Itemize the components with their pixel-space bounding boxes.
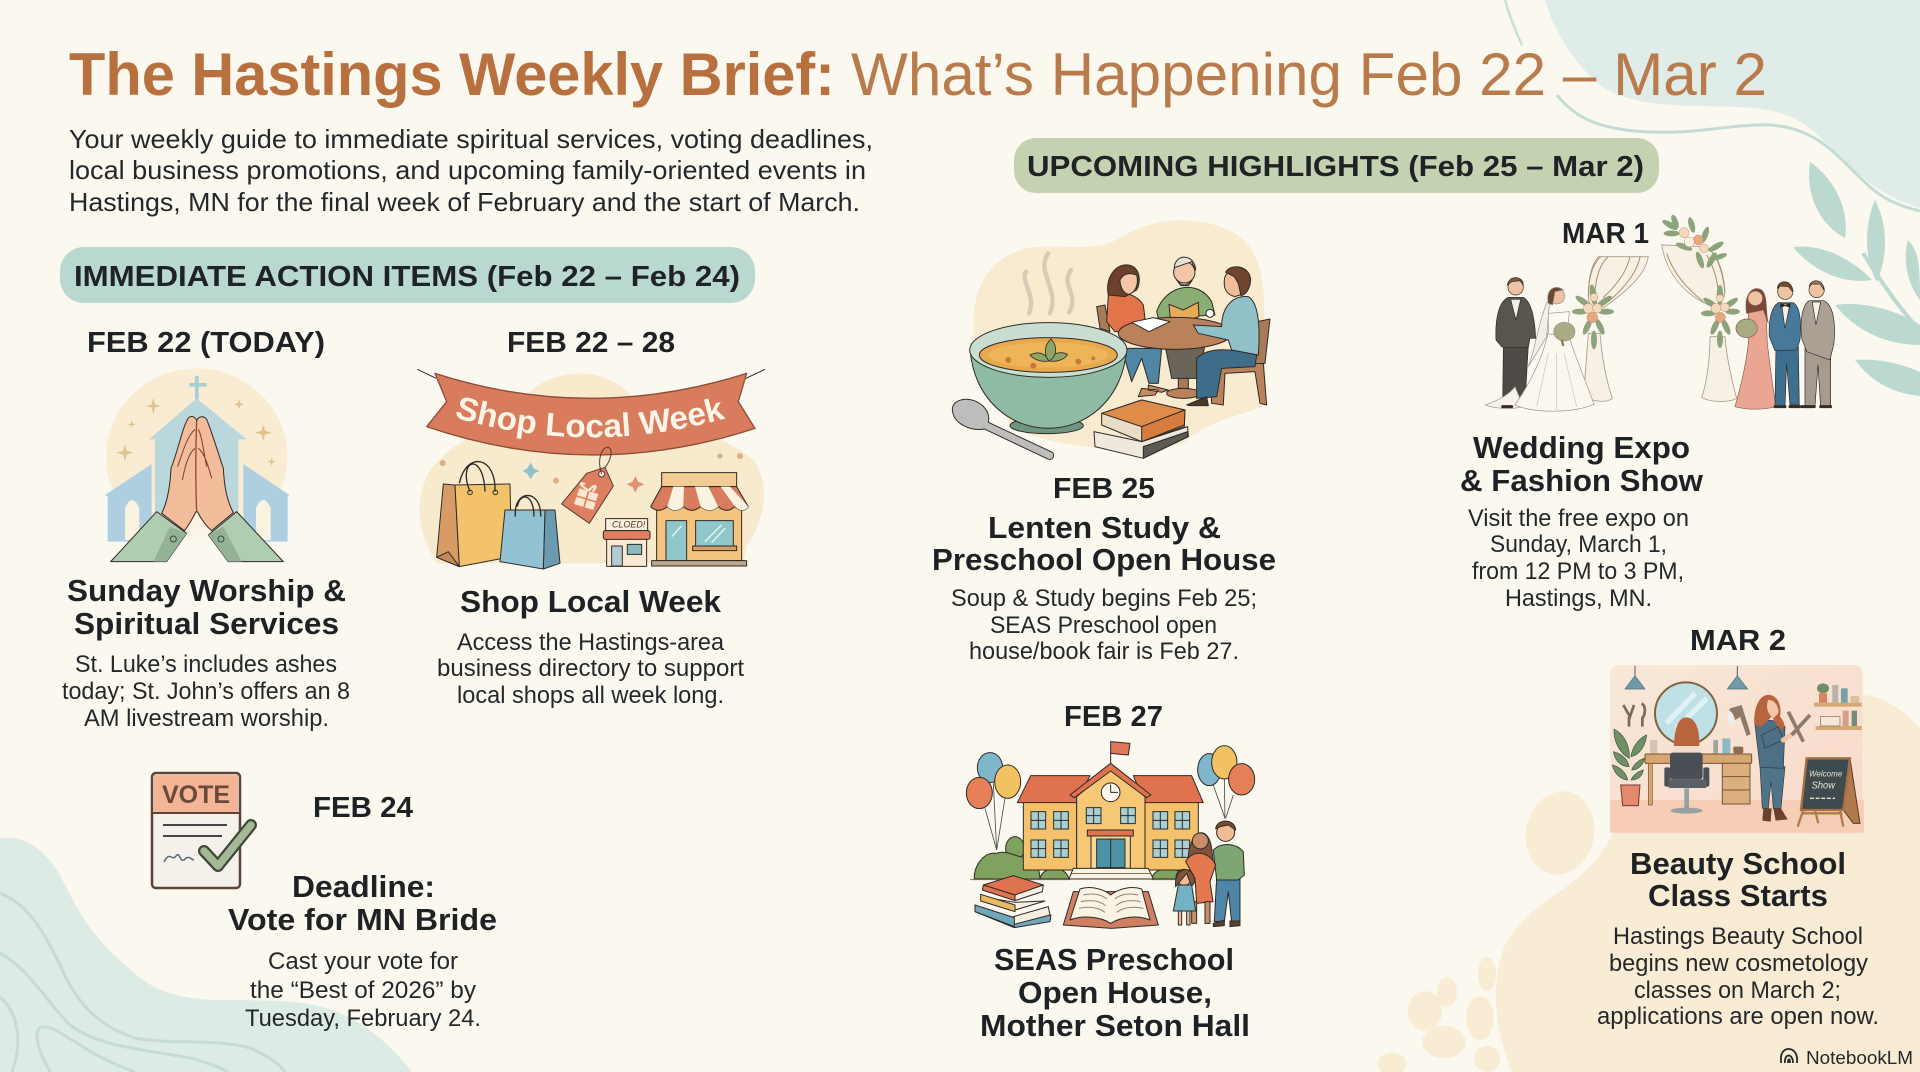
groomsmen	[1769, 281, 1835, 407]
plant	[1612, 729, 1647, 780]
heading: SEAS preschool: Open House,	[1018, 975, 1212, 1010]
heading and description: shop local week: business directory to support	[437, 655, 744, 682]
wall tools	[1623, 703, 1645, 727]
section heading: immediate action items	[60, 247, 755, 303]
heading and description: beauty school: classes on March 2;	[1634, 977, 1841, 1004]
background: leaves on right edge	[1793, 162, 1920, 396]
icon: vote ballot with check mark: VOTE	[162, 781, 230, 809]
open book	[1063, 888, 1158, 928]
heading and description: Sunday worship: Sunday Worship &	[67, 573, 346, 608]
icon: school with balloons, books and family	[966, 742, 1255, 928]
customer in chair	[1674, 717, 1699, 757]
heading and description: beauty school: Beauty School	[1630, 846, 1846, 881]
family	[1173, 821, 1244, 927]
heading and description: wedding expo: Sunday, March 1,	[1490, 531, 1667, 558]
heading and description: wedding expo: & Fashion Show	[1460, 463, 1704, 498]
section heading: upcoming highlights	[1014, 138, 1659, 193]
icon: soup bowl, books and study group	[952, 220, 1270, 459]
bridesmaid	[1735, 289, 1776, 409]
heading and description: Lenten study: SEAS Preschool open	[990, 612, 1217, 639]
heading and description: wedding expo: from 12 PM to 3 PM,	[1472, 558, 1684, 585]
heading and description: Lenten study: Soup & Study begins Feb 25;	[951, 585, 1257, 612]
section heading: immediate action items: IMMEDIATE ACTION ITEMS (Feb 22 – Feb 24)	[74, 261, 740, 293]
heading and description: vote deadline: the “Best of 2026” by	[250, 977, 476, 1004]
stack of books	[975, 876, 1051, 928]
heading and description: Sunday worship	[62, 573, 350, 732]
heading and description: Lenten study: Preschool Open House	[932, 542, 1276, 577]
heading and description: wedding expo: Visit the free expo on	[1468, 505, 1689, 532]
title: What’s Happening Feb 22 – Mar 2	[851, 41, 1767, 108]
intro text: Hastings, MN for the final week of February and the start of March.	[69, 187, 860, 217]
heading and description: Sunday worship: AM livestream worship.	[84, 705, 329, 732]
icon: shop local week banner and shops: CLOED!	[612, 520, 646, 530]
icon: beauty salon scene	[1610, 665, 1864, 833]
heading and description: beauty school: applications are open now.	[1597, 1003, 1879, 1030]
table and group	[1118, 257, 1232, 398]
arch right	[1662, 245, 1737, 401]
heading and description: Sunday worship: Spiritual Services	[74, 606, 339, 641]
date: Mar 1: MAR 1	[1562, 218, 1649, 250]
bride	[1485, 287, 1594, 411]
heading and description: vote deadline: Cast your vote for	[268, 948, 458, 975]
intro text: local business promotions, and upcoming family-oriented events in	[69, 155, 866, 185]
heading and description: shop local week: local shops all week long.	[457, 682, 724, 709]
chalkboard sign	[1843, 758, 1860, 823]
heading and description: beauty school: Hastings Beauty School	[1613, 923, 1863, 950]
title	[69, 41, 1767, 108]
section heading: upcoming highlights: UPCOMING HIGHLIGHTS (Feb 25 – Mar 2)	[1027, 151, 1644, 183]
arch left	[1583, 257, 1648, 401]
heading and description: Lenten study: house/book fair is Feb 27.	[969, 638, 1239, 665]
hairdresser	[1760, 765, 1785, 808]
heading and description: vote deadline	[228, 869, 497, 1032]
icon: wedding couple, floral arch and party	[1485, 214, 1835, 411]
heading and description: Lenten study	[932, 510, 1276, 665]
heading: SEAS preschool: Mother Seton Hall	[980, 1008, 1250, 1043]
icon: praying hands and church	[105, 368, 289, 562]
date: Feb 25: FEB 25	[1053, 473, 1155, 505]
heading and description: beauty school: Class Starts	[1648, 878, 1828, 913]
icon: beauty salon scene: Welcome	[1809, 769, 1842, 779]
date: Feb 24: FEB 24	[313, 792, 413, 824]
spoon	[952, 399, 1054, 459]
heading and description: wedding expo	[1460, 430, 1704, 612]
date: Feb 27: FEB 27	[1064, 701, 1163, 733]
shelves	[1814, 703, 1862, 707]
background: bottom-right tan blob	[1377, 695, 1920, 1072]
groom	[1496, 278, 1536, 407]
heading and description: shop local week: Access the Hastings-area	[457, 629, 725, 656]
heading and description: beauty school	[1597, 846, 1879, 1030]
heading and description: wedding expo: Hastings, MN.	[1505, 585, 1652, 612]
intro text: Your weekly guide to immediate spiritual services, voting deadlines,	[69, 124, 873, 154]
chair and woman	[1097, 265, 1168, 397]
title: The Hastings Weekly Brief:	[69, 41, 835, 108]
icon: shop local week banner and shops	[417, 368, 766, 570]
heading and description: beauty school: begins new cosmetology	[1609, 950, 1868, 977]
heading and description: wedding expo: Wedding Expo	[1473, 430, 1690, 465]
heading: SEAS preschool: SEAS Preschool	[994, 942, 1234, 977]
date: Feb 22-28: FEB 22 – 28	[507, 327, 675, 359]
icon: shop local week banner and shops: Shop Local Week	[456, 398, 726, 439]
heading and description: Sunday worship: St. Luke’s includes ashes	[75, 651, 337, 678]
soup bowl	[970, 323, 1127, 434]
icon: vote ballot with check mark	[152, 773, 251, 888]
heading and description: Lenten study: Lenten Study &	[988, 510, 1221, 545]
heading and description: Sunday worship: today; St. John’s offers an 8	[62, 678, 350, 705]
NotebookLM logo and wordmark: NotebookLM	[1806, 1048, 1913, 1068]
date: Mar 2: MAR 2	[1690, 625, 1786, 657]
background: top-right teal blob	[1505, 0, 1920, 211]
mirror	[1655, 682, 1717, 744]
date: Feb 22 today: FEB 22 (TODAY)	[87, 327, 325, 359]
heading and description: shop local week: Shop Local Week	[460, 584, 722, 619]
books	[1094, 400, 1188, 458]
heading and description: vote deadline: Tuesday, February 24.	[245, 1005, 481, 1032]
intro text	[69, 124, 873, 217]
foliage	[1572, 214, 1740, 349]
desk	[1645, 754, 1752, 763]
heading and description: vote deadline: Deadline:	[292, 869, 435, 904]
heading and description: vote deadline: Vote for MN Bride	[228, 902, 497, 937]
icon: beauty salon scene: Show	[1812, 780, 1836, 791]
man in blue with chair	[1187, 267, 1270, 406]
background: bottom-left teal blob	[0, 838, 412, 1072]
heading and description: shop local week	[437, 584, 744, 709]
heading: SEAS preschool	[980, 942, 1250, 1043]
